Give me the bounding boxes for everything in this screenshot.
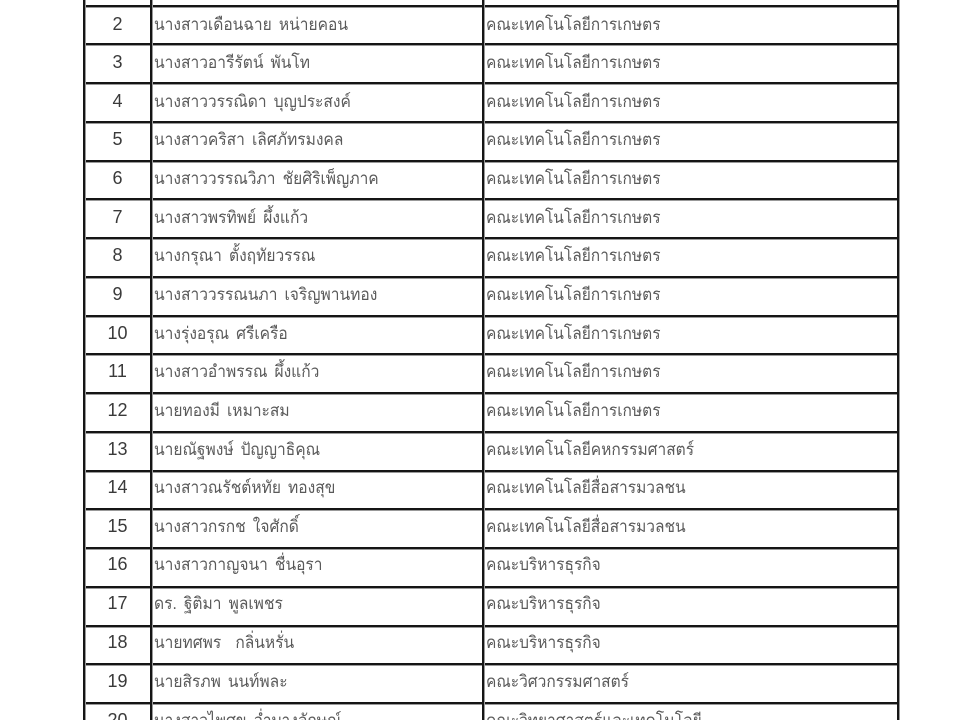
row 5: [112, 129, 661, 149]
row 6: คณะเทคโนโลยีการเกษตร: [486, 169, 661, 188]
row 19: [107, 671, 629, 691]
row 11: 11: [108, 361, 127, 381]
row 14: 14: [107, 477, 128, 497]
row 12: คณะเทคโนโลยีการเกษตร: [486, 401, 661, 420]
row 18: นายทศพร กลิ่นหรั่น: [154, 633, 294, 652]
row 19: คณะวิศวกรรมศาสตร์: [486, 672, 629, 691]
row 5: 5: [112, 129, 122, 149]
row 16: 16: [107, 554, 128, 574]
row 8: คณะเทคโนโลยีการเกษตร: [486, 246, 661, 265]
row 18: คณะบริหารธุรกิจ: [486, 633, 601, 652]
row 6: นางสาววรรณวิภา ชัยศิริเพ็ญภาค: [154, 169, 379, 188]
row 12: นายทองมี เหมาะสม: [154, 401, 290, 420]
row 8: [112, 243, 661, 266]
row 11: คณะเทคโนโลยีการเกษตร: [486, 362, 661, 381]
row 2: นางสาวเดือนฉาย หน่ายคอน: [154, 15, 348, 34]
row 7: คณะเทคโนโลยีการเกษตร: [486, 208, 661, 227]
row 6: 6: [112, 168, 122, 188]
row 4: 4: [112, 91, 122, 111]
row 9: นางสาววรรณนภา เจริญพานทอง: [154, 285, 377, 304]
row 3: นางสาวอารีรัตน์ พันโท: [154, 53, 310, 72]
row 13: [107, 439, 694, 460]
row 3: 3: [112, 52, 122, 72]
row 14: คณะเทคโนโลยีสื่อสารมวลชน: [486, 478, 686, 497]
row 17: คณะบริหารธุรกิจ: [486, 594, 601, 613]
row 11: [108, 359, 661, 381]
row 18: [107, 630, 601, 652]
row 16: นางสาวกาญจนา ชื่นอุรา: [154, 555, 323, 574]
row 14: [107, 476, 686, 498]
row 16: [107, 552, 601, 574]
row 9: คณะเทคโนโลยีการเกษตร: [486, 285, 661, 304]
row 18: 18: [107, 632, 128, 652]
row 9: [112, 284, 661, 304]
row 17: [107, 593, 601, 614]
row 12: [107, 400, 661, 420]
row 3: คณะเทคโนโลยีการเกษตร: [486, 53, 661, 72]
row 15: นางสาวกรกช ใจศักดิ์: [154, 517, 299, 536]
row 13: คณะเทคโนโลยีคหกรรมศาสตร์: [486, 440, 694, 459]
row 4: นางสาววรรณิดา บุญประสงค์: [154, 92, 351, 111]
row 8: 8: [112, 245, 122, 265]
row 8: นางกรุณา ตั้งฤทัยวรรณ: [154, 246, 315, 265]
row 10: [107, 323, 661, 344]
row 16: คณะบริหารธุรกิจ: [486, 555, 601, 574]
row 2: คณะเทคโนโลยีการเกษตร: [486, 15, 661, 34]
row 19: 19: [107, 671, 128, 691]
row 7: นางสาวพรทิพย์ ผึ้งแก้ว: [154, 208, 308, 227]
row 10: 10: [107, 323, 128, 343]
row 2: [112, 14, 661, 34]
row 9: 9: [112, 284, 122, 304]
row 12: 12: [107, 400, 128, 420]
row 5: นางสาวคริสา เลิศภัทรมงคล: [154, 130, 343, 149]
row 2: 2: [112, 14, 122, 34]
row 6: [112, 168, 661, 188]
row 13: 13: [107, 439, 128, 459]
row 17: ดร. ฐิติมา พูลเพชร: [154, 594, 283, 613]
row 10: คณะเทคโนโลยีการเกษตร: [486, 324, 661, 343]
row 15: [107, 514, 686, 536]
row 7: 7: [112, 207, 122, 227]
row 17: 17: [107, 593, 128, 613]
row 4: [112, 91, 661, 112]
row 15: 15: [107, 516, 128, 536]
row 19: นายสิรภพ นนท์พละ: [154, 672, 288, 691]
row 13: นายณัฐพงษ์ ปัญญาธิคุณ: [154, 440, 320, 459]
row 3: [112, 52, 661, 72]
row 7: [112, 205, 661, 227]
row 15: คณะเทคโนโลยีสื่อสารมวลชน: [486, 517, 686, 536]
row 11: นางสาวอำพรรณ ผึ้งแก้ว: [154, 362, 319, 381]
row 5: คณะเทคโนโลยีการเกษตร: [486, 130, 661, 149]
row 4: คณะเทคโนโลยีการเกษตร: [486, 92, 661, 111]
row 14: นางสาวณรัชต์หทัย ทองสุข: [154, 478, 335, 497]
row 20: [107, 708, 702, 720]
row 10: นางรุ่งอรุณ ศรีเครือ: [154, 324, 288, 343]
